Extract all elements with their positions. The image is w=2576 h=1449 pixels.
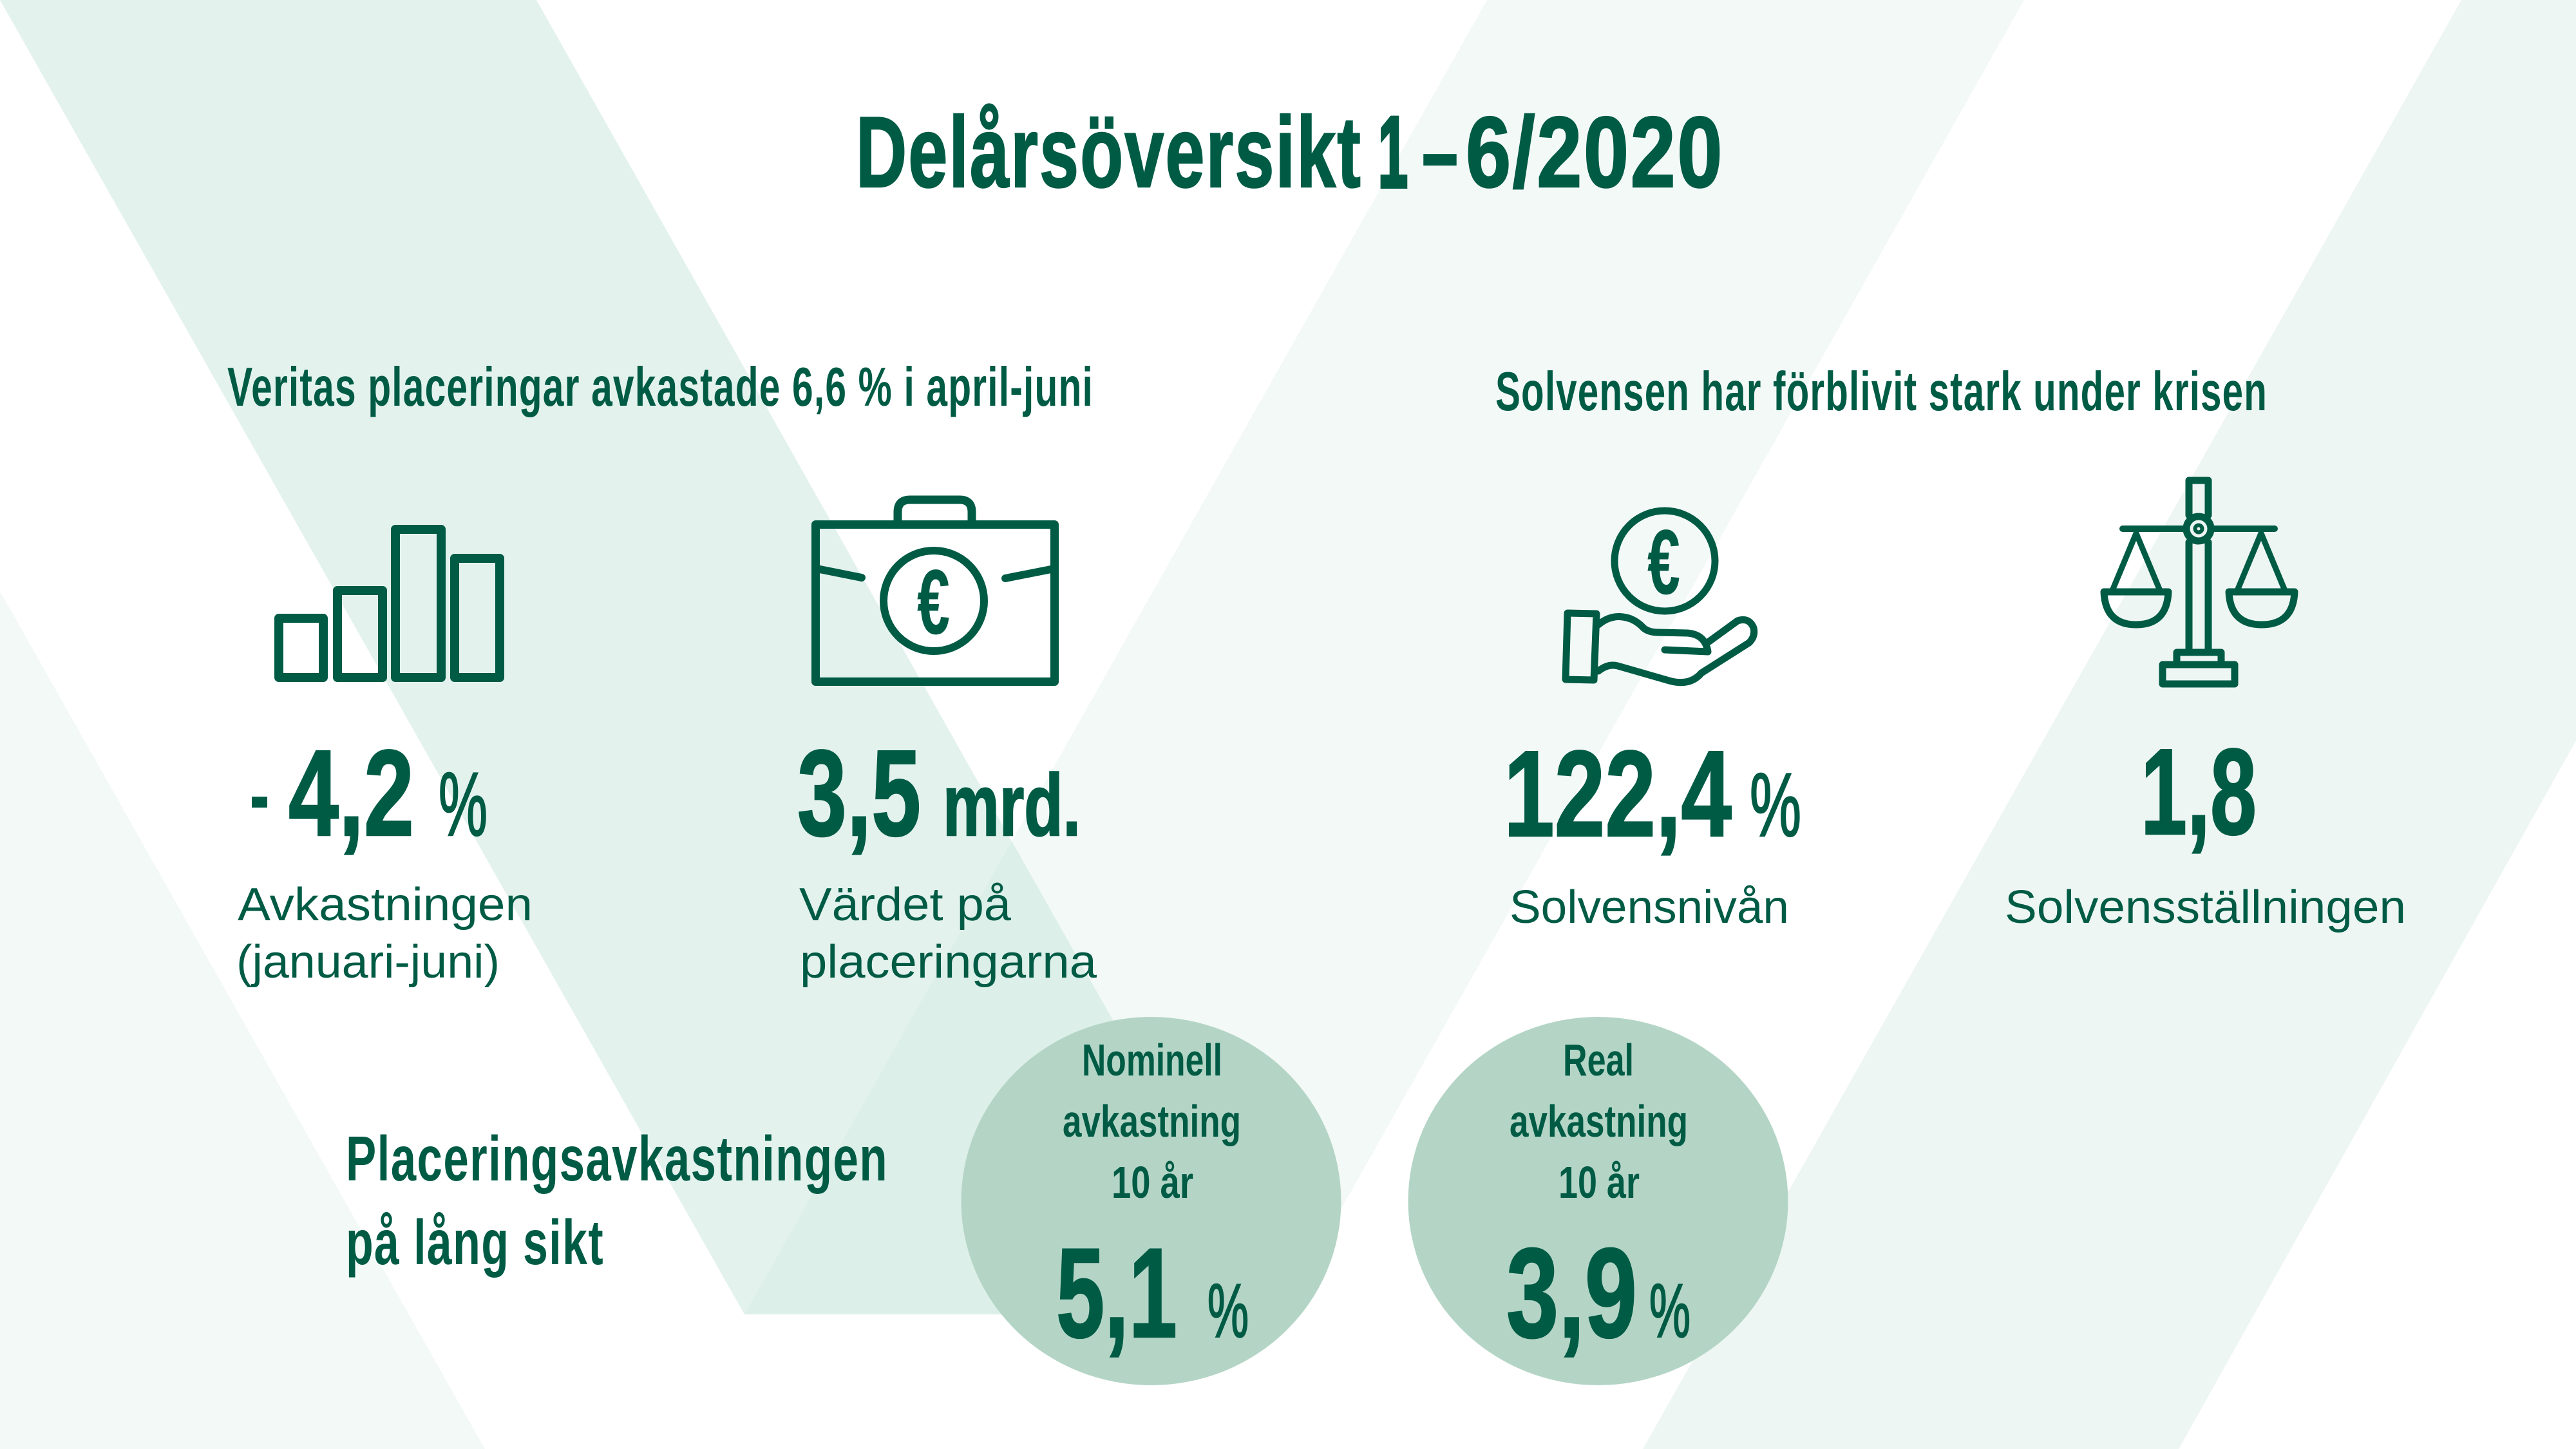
label: real return: Real: [1563, 1035, 1634, 1085]
label: return: (januari-juni): [236, 936, 500, 988]
stat: solvency position: 1,8: [2141, 724, 2257, 860]
heading: investments: Veritas placeringar avkastade 6,6 % i april-juni: [227, 357, 1094, 418]
label: solvency level: Solvensnivån: [1510, 882, 1789, 933]
label: solvency position: Solvensställningen: [2005, 882, 2406, 933]
label: nominal return: avkastning: [1063, 1096, 1241, 1146]
stat: solvency level: 122,4: [1504, 726, 1732, 862]
label: return: [236, 879, 533, 988]
panel: nominal return circle: [961, 1017, 1341, 1385]
stat: portfolio return: %: [439, 753, 488, 855]
label: nominal return: 10 år: [1112, 1157, 1193, 1208]
stat: investment value: [797, 725, 1081, 862]
label: nominal return: Nominell: [1082, 1035, 1222, 1085]
stat: investment value: 3,5: [797, 725, 921, 862]
title: Delårsöversikt: [856, 97, 1362, 209]
icon: balance scale: [2104, 480, 2295, 684]
icon: briefcase with euro coin: €: [917, 551, 950, 654]
label: investment value: [799, 879, 1097, 988]
icon: hand holding euro coin: €: [1647, 511, 1680, 614]
title: –: [1422, 97, 1458, 209]
value: nominal return: 5,1: [1056, 1222, 1177, 1364]
stat: solvency level: %: [1750, 754, 1801, 855]
value: real return: %: [1649, 1269, 1690, 1354]
label: investment value: placeringarna: [800, 936, 1097, 988]
icon: bar chart: [279, 529, 500, 677]
title: 1: [1378, 97, 1408, 209]
label: real return: avkastning: [1510, 1096, 1688, 1146]
heading: long-term return: på lång sikt: [346, 1207, 604, 1278]
title: 6/2020: [1466, 97, 1724, 209]
heading: long-term return: [346, 1123, 888, 1278]
icon: hand holding euro coin: [1566, 511, 1754, 683]
icon: briefcase with euro coin: [815, 500, 1055, 681]
value: real return: 3,9: [1506, 1222, 1637, 1364]
label: nominal return: [1063, 1035, 1241, 1208]
label: return: Avkastningen: [238, 879, 533, 931]
stat: investment value: mrd.: [943, 756, 1081, 854]
label: investment value: Värdet på: [799, 879, 1012, 931]
stat: portfolio return: 4,2: [289, 725, 414, 862]
value: nominal return: %: [1208, 1269, 1249, 1354]
label: real return: 10 år: [1558, 1157, 1640, 1208]
label: real return: [1510, 1035, 1688, 1208]
heading: long-term return: Placeringsavkastningen: [346, 1123, 888, 1194]
panel: real return circle: [1408, 1017, 1788, 1385]
